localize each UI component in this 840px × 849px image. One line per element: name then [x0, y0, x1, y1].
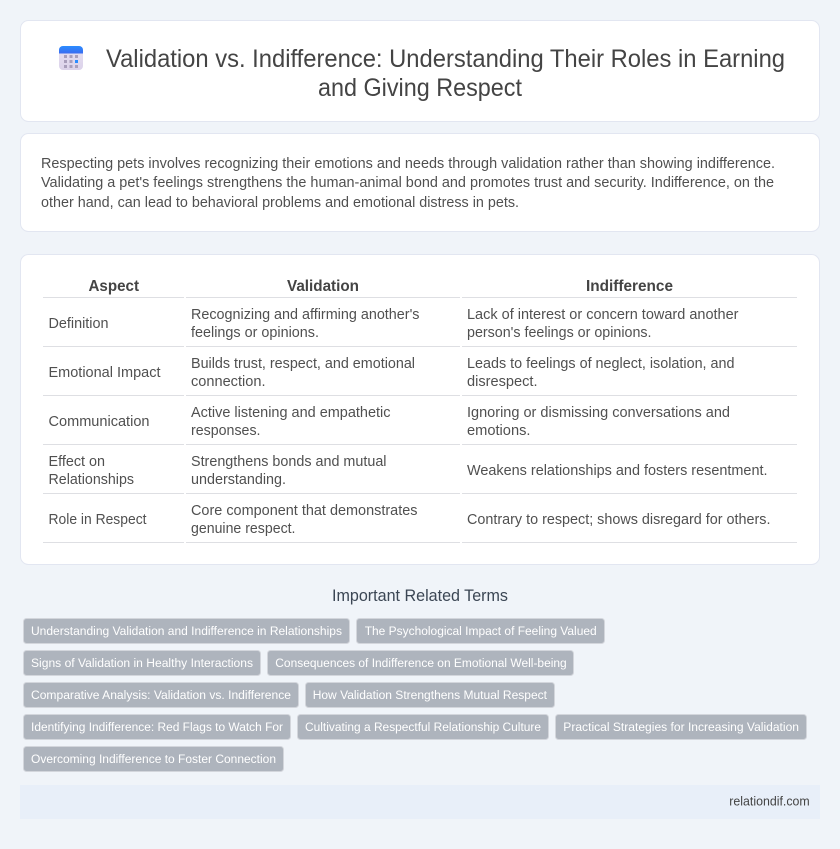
row: communication: responses.	[191, 423, 260, 439]
tag	[268, 650, 574, 676]
row: definition: Recognizing and affirming another's	[191, 307, 420, 323]
tag	[24, 714, 290, 740]
row: role in respect: Contrary to respect; shows disregard for others.	[467, 512, 770, 528]
footer: relationdif.com	[729, 794, 810, 808]
tag: Practical Strategies for Increasing Validation	[563, 720, 799, 734]
tag	[306, 682, 554, 708]
intro text: Validating a pet's feelings strengthens the human-animal bond and promotes trust and security. Indifference, on the	[41, 175, 774, 191]
tag: The Psychological Impact of Feeling Valued	[365, 624, 597, 638]
row: definition: Definition	[48, 316, 108, 332]
table header: Indifference	[586, 278, 673, 295]
tag: Cultivating a Respectful Relationship Culture	[305, 720, 541, 734]
row: communication: Ignoring or dismissing conversations and	[467, 405, 730, 421]
row: role in respect	[48, 503, 770, 537]
row: definition	[48, 307, 739, 341]
tag	[356, 618, 604, 644]
tag: Comparative Analysis: Validation vs. Indifference	[31, 688, 291, 702]
heading: important related terms: Important Related Terms	[332, 587, 508, 605]
tag	[556, 714, 806, 740]
tag	[24, 650, 260, 676]
tag: How Validation Strengthens Mutual Respect	[313, 688, 548, 702]
row: definition: feelings or opinions.	[191, 325, 319, 341]
table header: Validation	[287, 278, 359, 295]
table header	[88, 278, 673, 295]
row: effect on relationships: Weakens relationships and fosters resentment.	[467, 463, 768, 479]
tag	[24, 682, 298, 708]
tag: Consequences of Indifference on Emotional Well-being	[275, 656, 567, 670]
row: emotional impact: Builds trust, respect, and emotional	[191, 356, 415, 372]
tag	[298, 714, 548, 740]
row: communication	[48, 405, 730, 439]
panel: introduction	[20, 134, 820, 232]
row: emotional impact	[48, 356, 734, 390]
row: definition: Lack of interest or concern toward another	[467, 307, 739, 323]
row: role in respect: Role in Respect	[48, 512, 146, 528]
row: emotional impact: disrespect.	[467, 374, 538, 390]
related terms tags	[24, 618, 806, 772]
icon: calendar	[59, 46, 83, 70]
row: communication: Communication	[48, 414, 150, 430]
tag: Signs of Validation in Healthy Interactions	[31, 656, 253, 670]
row: communication: emotions.	[467, 423, 530, 439]
row: effect on relationships: Strengthens bonds and mutual	[191, 454, 386, 470]
title: Validation vs. Indifference: Understanding Their Roles in Earning	[106, 45, 785, 73]
row: role in respect: Core component that demonstrates	[191, 503, 418, 519]
row: emotional impact: Emotional Impact	[48, 365, 160, 381]
tag	[24, 618, 350, 644]
row: effect on relationships: understanding.	[191, 472, 286, 488]
row: effect on relationships: Relationships	[48, 472, 134, 488]
row: role in respect: genuine respect.	[191, 521, 296, 537]
intro text: Respecting pets involves recognizing their emotions and needs through validation rather than showing indifference.	[41, 156, 775, 172]
title	[106, 45, 785, 102]
tag	[24, 746, 284, 772]
tag: Understanding Validation and Indifference in Relationships	[31, 624, 342, 638]
row: emotional impact: Leads to feelings of neglect, isolation, and	[467, 356, 734, 372]
tag: Overcoming Indifference to Foster Connection	[31, 752, 276, 766]
intro text	[41, 156, 775, 211]
intro text: other hand, can lead to behavioral problems and emotional distress in pets.	[41, 195, 519, 211]
row: communication: Active listening and empathetic	[191, 405, 390, 421]
table header: Aspect	[88, 278, 140, 295]
row: effect on relationships: Effect on	[48, 454, 105, 470]
panel: comparison table	[20, 254, 820, 564]
panel: header	[20, 20, 820, 122]
tag: Identifying Indifference: Red Flags to Watch For	[31, 720, 283, 734]
row: effect on relationships	[48, 454, 768, 488]
row: emotional impact: connection.	[191, 374, 266, 390]
row: definition: person's feelings or opinions.	[467, 325, 652, 341]
title: and Giving Respect	[318, 74, 522, 102]
footer	[20, 785, 820, 819]
